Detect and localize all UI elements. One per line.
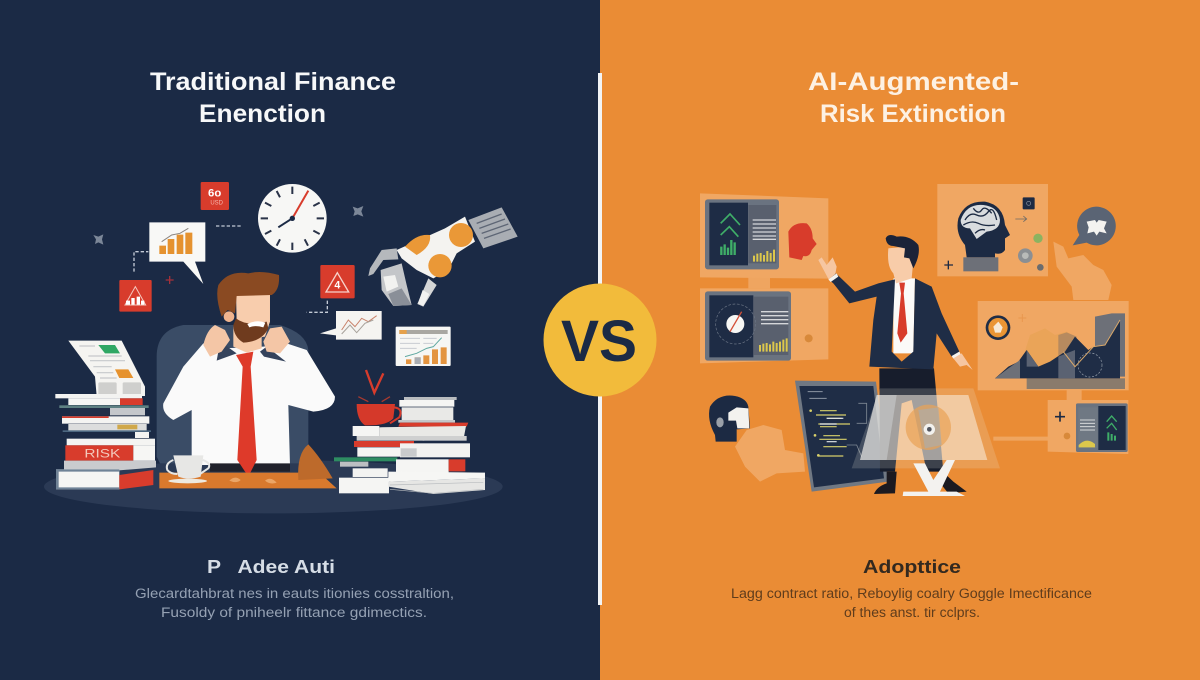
puzzle cloud lower	[735, 425, 805, 482]
collar	[217, 345, 286, 362]
white cuffs	[828, 273, 961, 359]
lower hand	[953, 353, 973, 370]
left description: Glecardtahbrat nes in eauts itionies cosstraltion,	[135, 586, 454, 601]
red warning badge left	[119, 280, 152, 312]
hands at collar	[203, 325, 290, 357]
VS badge: VS	[561, 309, 637, 374]
white shirt body	[163, 343, 335, 465]
document sheet	[68, 341, 145, 396]
beard	[233, 318, 268, 343]
connecting glow panels	[748, 277, 1082, 441]
desk hand marks	[229, 478, 277, 483]
left description	[135, 586, 454, 620]
red tie	[897, 283, 907, 343]
book stack left with RISK book	[55, 394, 156, 489]
shoes	[874, 472, 967, 494]
plus sign	[166, 276, 174, 284]
right heading	[808, 68, 1019, 128]
icon: head silhouette lower-left	[709, 396, 750, 442]
face	[236, 292, 270, 340]
neck and face	[888, 247, 914, 283]
center divider line	[598, 73, 602, 605]
icon: red head profile	[788, 223, 817, 260]
right heading: Risk Extinction	[820, 100, 1006, 128]
left illustration: stressed analyst at desk	[44, 182, 518, 513]
gear emblem	[906, 405, 951, 450]
right description: of thes anst. tir cclprs.	[844, 605, 980, 620]
panel: traditional finance background	[0, 0, 600, 680]
red warning badge right	[320, 265, 355, 298]
puzzle cloud upper	[1053, 242, 1112, 300]
panel: dashboard top-left	[700, 193, 828, 279]
presenter figure	[818, 235, 973, 494]
analyst figure	[163, 272, 335, 477]
left description: Fusoldy of pniheelr fittance gdimectics.	[161, 605, 427, 620]
office chair	[157, 325, 308, 463]
right heading: AI-Augmented-	[808, 68, 1019, 96]
white coffee cup	[167, 455, 209, 483]
red badge: price	[201, 182, 229, 210]
left heading	[150, 68, 396, 128]
ground shadow	[44, 460, 503, 513]
trousers	[879, 368, 943, 472]
left heading: Enenction	[199, 100, 326, 128]
right description: Lagg contract ratio, Reboylig coalry Goggle Imectificance	[731, 586, 1092, 601]
robotic arm	[368, 207, 518, 307]
VS badge	[544, 284, 656, 396]
speech icon: open book	[1073, 207, 1116, 245]
decorative star	[353, 206, 363, 217]
shirt	[893, 278, 915, 353]
left subheading: P Adee Auti	[207, 557, 335, 577]
panel: dashboard mid-left	[700, 288, 828, 363]
left heading: Traditional Finance	[150, 68, 396, 96]
neck	[233, 327, 262, 353]
panel: area chart right	[978, 301, 1129, 390]
decorative star	[93, 234, 103, 245]
suit jacket with raised arm	[829, 273, 959, 369]
icon: wall clock	[258, 184, 327, 253]
report card with chart	[396, 327, 451, 366]
badge icon	[986, 315, 1010, 340]
right description	[731, 586, 1092, 620]
panel: brain top-right	[937, 184, 1048, 276]
transparent gear display with stand	[852, 388, 1000, 496]
right subheading: Adopttice	[863, 557, 961, 577]
brown hair	[217, 272, 279, 317]
code terminal tablet	[795, 381, 888, 492]
gritted teeth	[247, 321, 265, 327]
RISK label: RISK	[84, 446, 120, 460]
hair	[886, 235, 919, 268]
icon: head with brain	[957, 202, 1010, 257]
red badge: price: USD	[210, 201, 224, 207]
red badge: price: 6o	[208, 188, 221, 200]
red warning badge right: 4	[334, 280, 340, 292]
right illustration: presenter with AI dashboards	[700, 184, 1129, 496]
raised hand	[818, 257, 837, 279]
panel: AI-augmented background	[600, 0, 1200, 680]
speech bubble: line chart	[320, 311, 382, 340]
speech bubble: bar chart	[149, 222, 205, 284]
nameplate triangle	[298, 444, 333, 480]
red mug with steam	[357, 370, 401, 425]
panel: small dashboard lower right	[1048, 400, 1128, 454]
red necktie	[236, 352, 257, 477]
book stack right	[334, 397, 485, 494]
dashed connector	[134, 226, 327, 312]
orange desk	[159, 472, 337, 488]
